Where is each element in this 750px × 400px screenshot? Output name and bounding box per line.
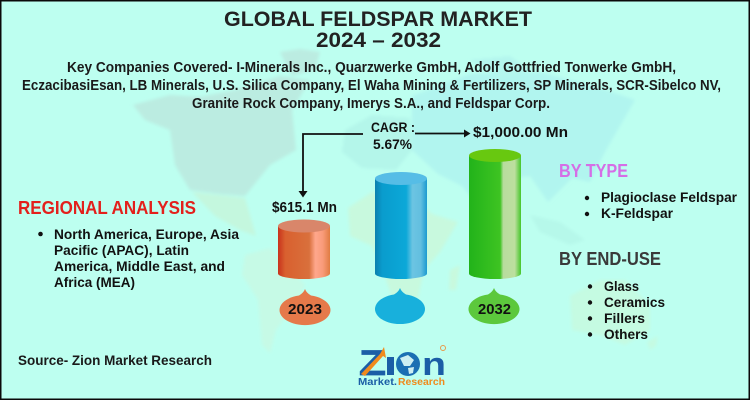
logo: Zion Market Research: Z [359, 344, 386, 383]
end-use list: Others [604, 327, 648, 342]
by type list: K-Feldspar [601, 206, 674, 221]
bar: middle cylinder [375, 172, 427, 279]
arrow: CAGR to 2023 value [298, 134, 363, 198]
value 2032: $1,000.00 Mn [473, 124, 568, 141]
heading: by type: BY TYPE [559, 161, 628, 181]
logo: Zion Market Research: Research [398, 376, 445, 388]
regional list: America, Middle East, and [54, 259, 225, 274]
title [224, 8, 532, 52]
regional list: Africa (MEA) [54, 275, 135, 290]
title: GLOBAL FELDSPAR MARKET [224, 8, 532, 31]
regional list [38, 227, 239, 290]
year badge: 2032 [469, 288, 520, 324]
regional list: Pacific (APAC), Latin [54, 243, 189, 258]
heading: regional analysis: REGIONAL ANALYSIS [18, 198, 196, 218]
logo: Zion Market Research: n [422, 346, 446, 382]
key companies text block: Key Companies Covered- I-Minerals Inc., Quarzwerke GmbH, Adolf Gottfried Tonwerke GmbH, [67, 60, 676, 76]
end-use list [588, 279, 665, 342]
logo: Zion Market Research: Market. [358, 376, 397, 388]
source note: Source- Zion Market Research [18, 352, 212, 368]
heading: by end-use: BY END-USE [559, 249, 661, 269]
bar: 2032 cylinder [469, 149, 521, 279]
bar: 2023 cylinder [278, 220, 330, 279]
year badge: 2023: 2023 [288, 302, 322, 318]
key companies text block [22, 60, 721, 112]
end-use list: Fillers [604, 311, 645, 326]
regional list: North America, Europe, Asia [54, 227, 239, 242]
arrow: CAGR to 2032 value [415, 130, 470, 138]
year badge: middle [375, 288, 425, 324]
by type list: Plagioclase Feldspar [601, 190, 738, 205]
icon: globe [396, 352, 420, 376]
CAGR label: CAGR : [371, 120, 415, 135]
end-use list: Ceramics [604, 295, 665, 310]
logo: Zion Market Research [358, 344, 446, 388]
CAGR label: 5.67% [373, 137, 412, 152]
title: 2024 – 2032 [316, 29, 441, 52]
world map watermark [133, 49, 658, 353]
by type list [585, 190, 738, 221]
CAGR label [371, 120, 415, 152]
key companies text block: Granite Rock Company, Imerys S.A., and Feldspar Corp. [192, 96, 550, 112]
year badge: 2032: 2032 [478, 302, 511, 318]
end-use list: Glass [604, 279, 639, 294]
value 2023: $615.1 Mn [272, 200, 337, 216]
year badge: 2023 [280, 289, 330, 325]
